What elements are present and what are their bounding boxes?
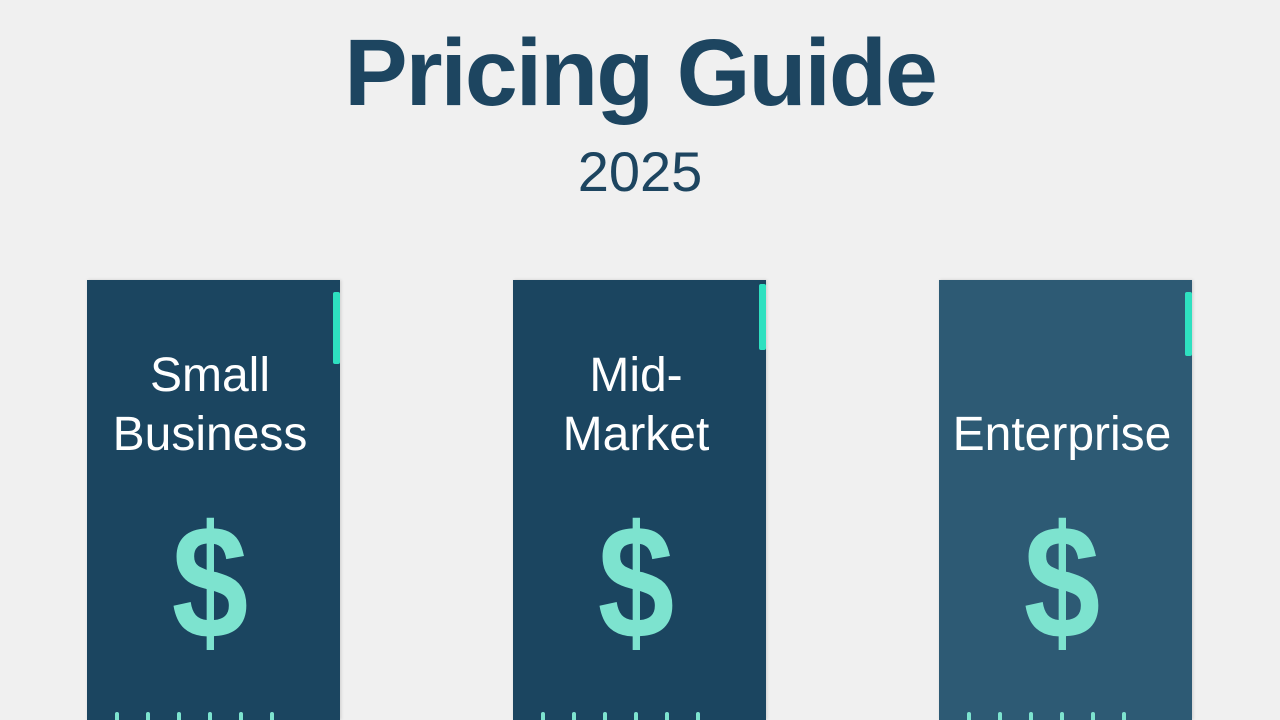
icon: dollar: $ xyxy=(1024,492,1100,673)
heading: mid-market: Mid- xyxy=(589,349,683,402)
tick marks xyxy=(967,712,1126,720)
panel: mid-market xyxy=(513,280,766,720)
title: Pricing Guide xyxy=(344,20,936,126)
heading: small business: Business xyxy=(113,408,307,461)
tick marks xyxy=(115,712,274,720)
icon: dollar: $ xyxy=(598,492,674,673)
tick marks xyxy=(541,712,700,720)
heading: enterprise: Enterprise xyxy=(953,408,1171,461)
subtitle: year: 2025 xyxy=(578,140,702,203)
heading: small business: Small xyxy=(150,349,270,402)
heading: mid-market xyxy=(563,349,709,461)
accent bar xyxy=(1185,292,1192,356)
accent bar xyxy=(759,284,766,350)
icon: dollar: $ xyxy=(172,492,248,673)
accent bar xyxy=(333,292,340,364)
heading: small business xyxy=(113,349,307,461)
panel: small business xyxy=(87,280,340,720)
panel: enterprise xyxy=(939,280,1192,720)
heading: mid-market: Market xyxy=(563,408,709,461)
